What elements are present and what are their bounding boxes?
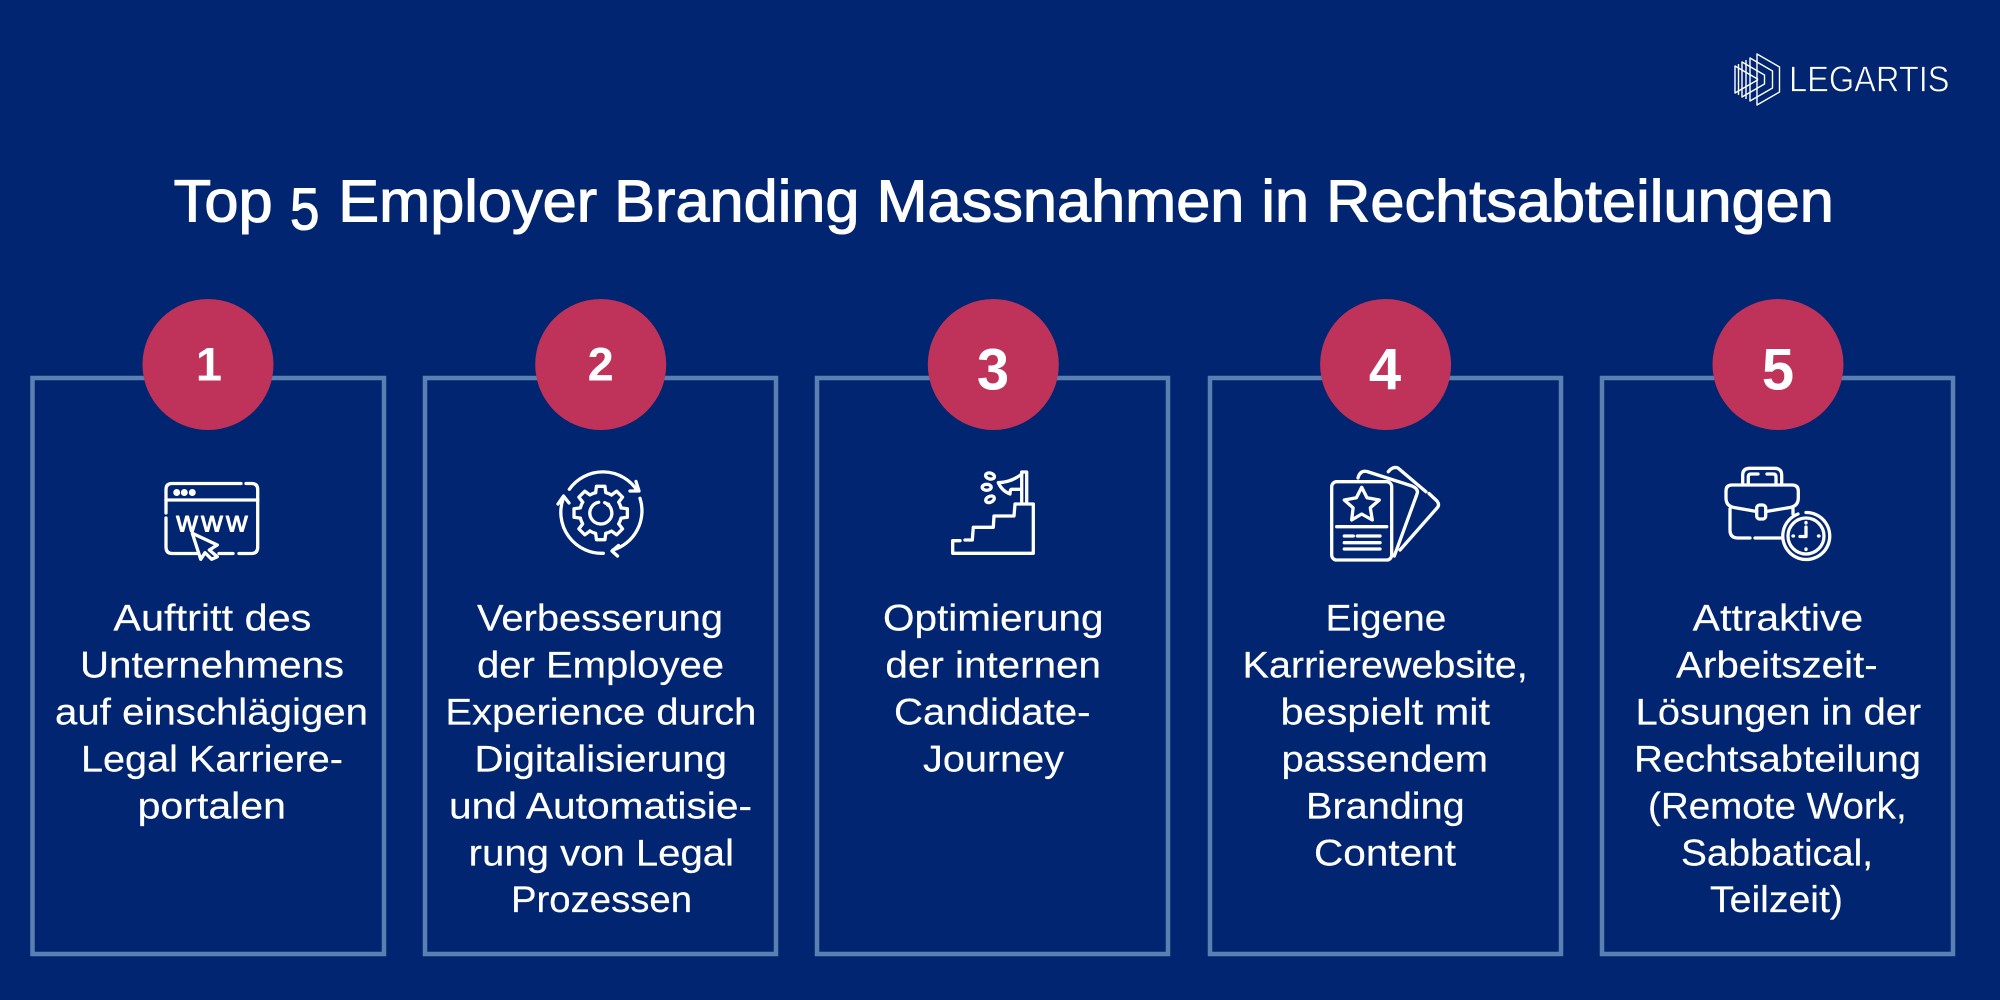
icon: document cards with star <box>1332 467 1438 560</box>
icon: browser window with cursor: www <box>175 506 248 539</box>
text block 1: portalen <box>138 786 286 826</box>
card frame 2 <box>425 378 776 954</box>
text block 1 <box>55 598 368 826</box>
text block 3: Journey <box>923 738 1065 780</box>
text block 5: Sabbatical, <box>1681 832 1873 873</box>
number badge 2 <box>535 299 666 430</box>
panel 4: Karrierewebsite <box>1210 299 1561 954</box>
number badge 5 <box>1712 299 1844 430</box>
text block 5: Rechtsabteilung <box>1634 738 1921 780</box>
card frame 5 <box>1602 378 1953 954</box>
text block 1: Legal Karriere- <box>81 738 343 780</box>
text block 4: bespielt mit <box>1280 692 1491 732</box>
number badge 3: 3 <box>977 338 1009 402</box>
text block 3: der internen <box>885 645 1101 686</box>
text block 4: Branding <box>1306 786 1465 826</box>
text block 2: Prozessen <box>511 879 692 920</box>
title: Employer Branding Massnahmen in Rechtsabteilungen <box>338 169 1834 235</box>
number badge 1: 1 <box>196 338 222 391</box>
panel 1: Auftritt <box>32 299 384 954</box>
text block 4: passendem <box>1282 738 1488 780</box>
text block 1: auf einschlägigen <box>55 692 368 732</box>
text block 4 <box>1243 598 1528 873</box>
text block 5: Teilzeit) <box>1710 879 1843 920</box>
text block 3: Candidate- <box>894 692 1090 732</box>
number badge 1 <box>142 299 274 430</box>
icon: browser window with cursor <box>166 484 258 559</box>
logo: Legartis <box>1735 54 1950 105</box>
number badge 4 <box>1320 299 1451 430</box>
number badge 2: 2 <box>588 338 614 391</box>
icon: logo mark <box>1735 54 1780 105</box>
text block 2: Verbesserung <box>477 598 723 639</box>
number badge 4: 4 <box>1369 337 1401 402</box>
text block 5: Lösungen in der <box>1636 692 1921 732</box>
text block 1: Auftritt des <box>113 598 311 639</box>
text block 4: Eigene <box>1326 598 1446 639</box>
panel 5: Arbeitszeit <box>1602 299 1953 954</box>
panel 3: Candidate Journey <box>817 299 1168 954</box>
title: 5 <box>290 177 320 243</box>
text block 5: (Remote Work, <box>1648 786 1907 826</box>
card frame 3 <box>817 378 1168 954</box>
text block 4: Karrierewebsite, <box>1243 645 1528 686</box>
icon: stairs with flag <box>953 472 1033 553</box>
text block 4: Content <box>1314 832 1457 873</box>
icon: gear with circular arrows <box>558 472 642 556</box>
text block 3 <box>883 598 1104 780</box>
text block 2: und Automatisie- <box>449 786 752 826</box>
text block 1: Unternehmens <box>80 645 344 686</box>
text block 2: rung von Legal <box>469 832 734 873</box>
text block 2: Digitalisierung <box>474 738 727 780</box>
text block 2: Experience durch <box>445 692 756 732</box>
title: Top <box>174 169 273 235</box>
number badge 5: 5 <box>1762 338 1794 402</box>
card frame 1 <box>32 378 384 954</box>
card frame 4 <box>1210 378 1561 954</box>
text block 5: Arbeitszeit- <box>1676 645 1878 686</box>
text block 5: Attraktive <box>1693 598 1863 639</box>
text block 5 <box>1634 598 1921 920</box>
icon: briefcase with clock <box>1726 468 1830 559</box>
text block 2 <box>445 598 756 920</box>
panel 2: Employee Experience <box>425 299 776 954</box>
text block 2: der Employee <box>477 645 724 686</box>
number badge 3 <box>928 299 1059 430</box>
logo wordmark: LEGARTIS <box>1789 59 1950 100</box>
text block 3: Optimierung <box>883 598 1104 639</box>
